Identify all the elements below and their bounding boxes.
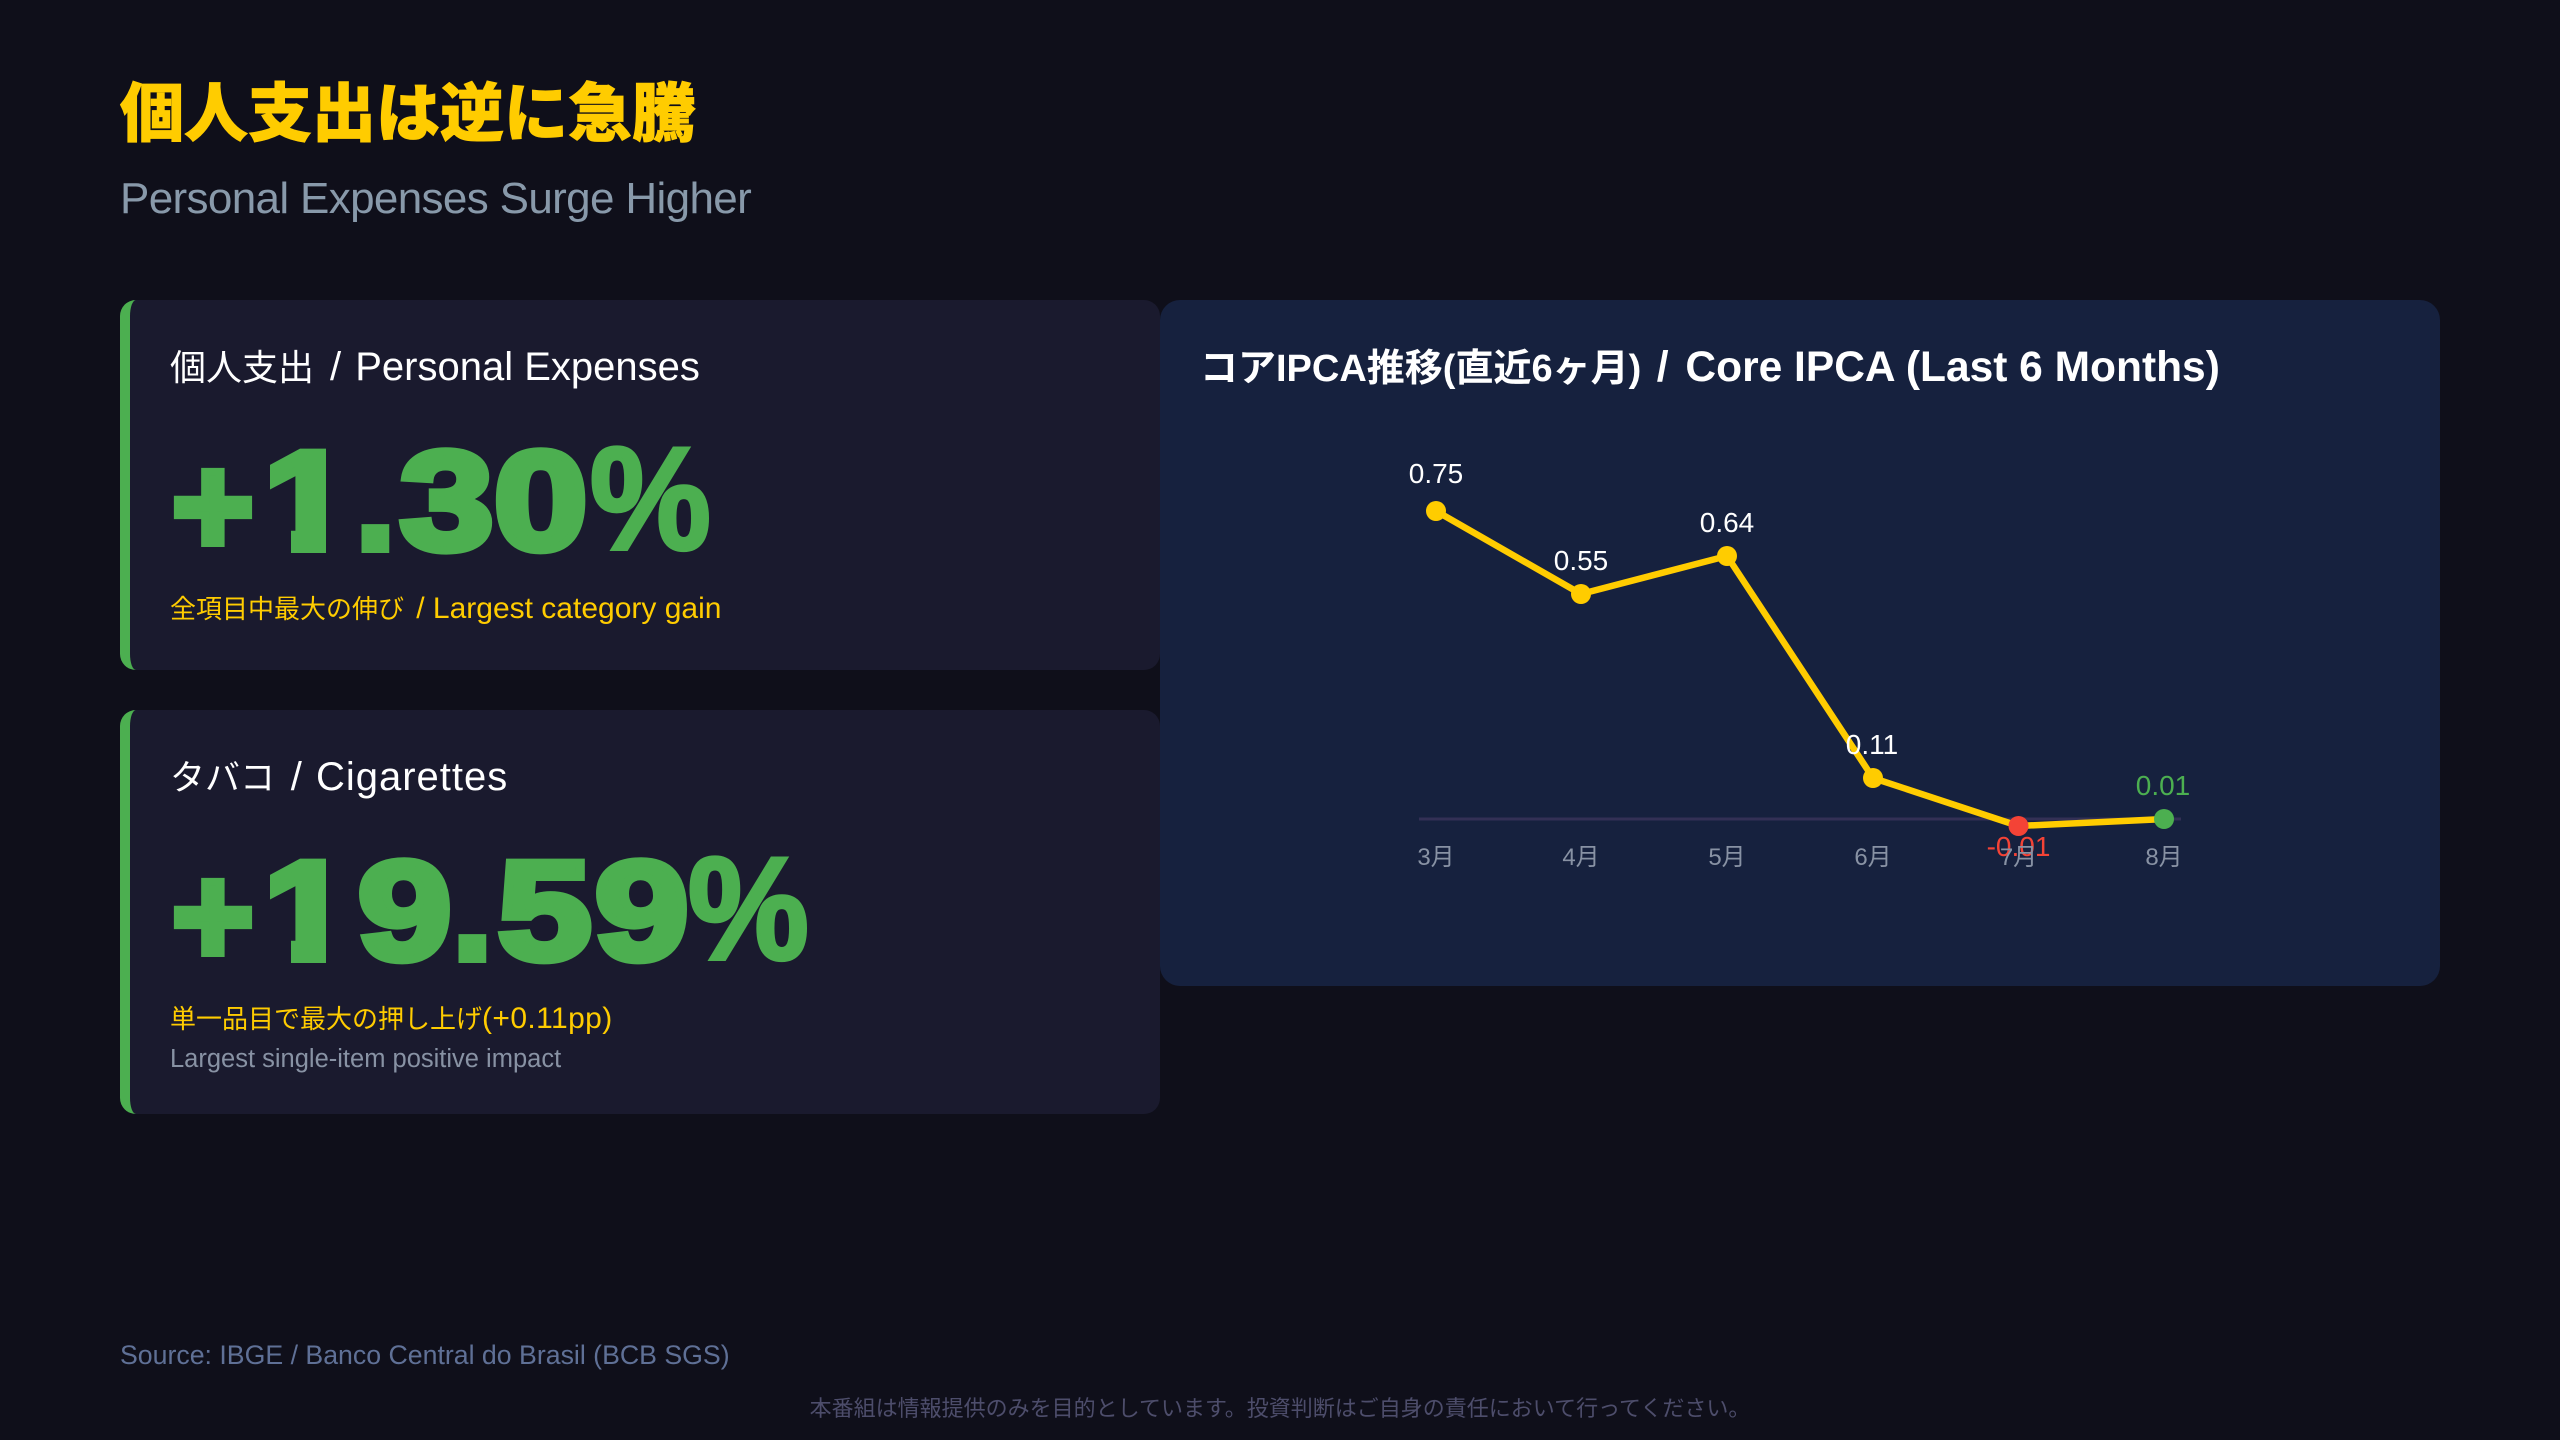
subtitle: Personal Expenses Surge Higher (120, 174, 751, 223)
month labels: 3月 (1417, 844, 1455, 871)
month labels: 8月 (2145, 844, 2183, 871)
big number: 0 (494, 422, 587, 579)
panel: personal expenses (120, 300, 1160, 670)
value labels: 0.11 (1846, 729, 1898, 760)
big number: 3 (400, 422, 493, 579)
big number: + (172, 837, 254, 990)
big number (172, 420, 711, 580)
panel: core IPCA chart (1160, 300, 2440, 986)
card note english: Largest single-item positive impact (170, 1045, 561, 1073)
source note: Source: IBGE / Banco Central do Brasil (BCB SGS) (120, 1340, 730, 1370)
month labels: 5月 (1708, 844, 1746, 871)
big number: . (356, 422, 395, 579)
data points (1426, 501, 2174, 836)
value labels: 0.01 (2136, 770, 2190, 801)
big number: 9 (595, 832, 688, 989)
chart heading: コアIPCA推移(直近6ヶ月) / Core IPCA (Last 6 Months) (1200, 344, 2220, 391)
big number: % (590, 420, 711, 580)
card note: 単一品目で最大の押し上げ(+0.11pp) (170, 1002, 613, 1035)
big number: % (688, 830, 809, 990)
big number (172, 830, 809, 990)
value labels: 0.55 (1554, 545, 1608, 576)
big number: 1 (261, 832, 354, 989)
month labels: 4月 (1562, 844, 1600, 871)
value labels (1409, 458, 2190, 862)
value labels: -0.01 (1987, 831, 2050, 862)
big number: . (453, 832, 492, 989)
month labels: 6月 (1854, 844, 1892, 871)
card heading: タバコ / Cigarettes (170, 755, 508, 799)
big number: 9 (358, 832, 451, 989)
big number: 1 (261, 422, 354, 579)
month labels (1417, 844, 2183, 871)
line chart (1409, 458, 2190, 871)
card note: 全項目中最大の伸び / Largest category gain (170, 592, 721, 625)
value labels: 0.75 (1409, 458, 1463, 489)
big number: 5 (498, 832, 591, 989)
disclaimer: 本番組は情報提供のみを目的としています。投資判断はご自身の責任において行ってください。 (810, 1396, 1750, 1421)
value labels: 0.64 (1700, 507, 1754, 538)
title: 個人支出は逆に急騰 (120, 78, 696, 150)
panel: cigarettes (120, 710, 1160, 1114)
big number: + (172, 427, 254, 580)
card heading: 個人支出 / Personal Expenses (170, 345, 700, 389)
month labels: 7月 (2000, 844, 2037, 871)
